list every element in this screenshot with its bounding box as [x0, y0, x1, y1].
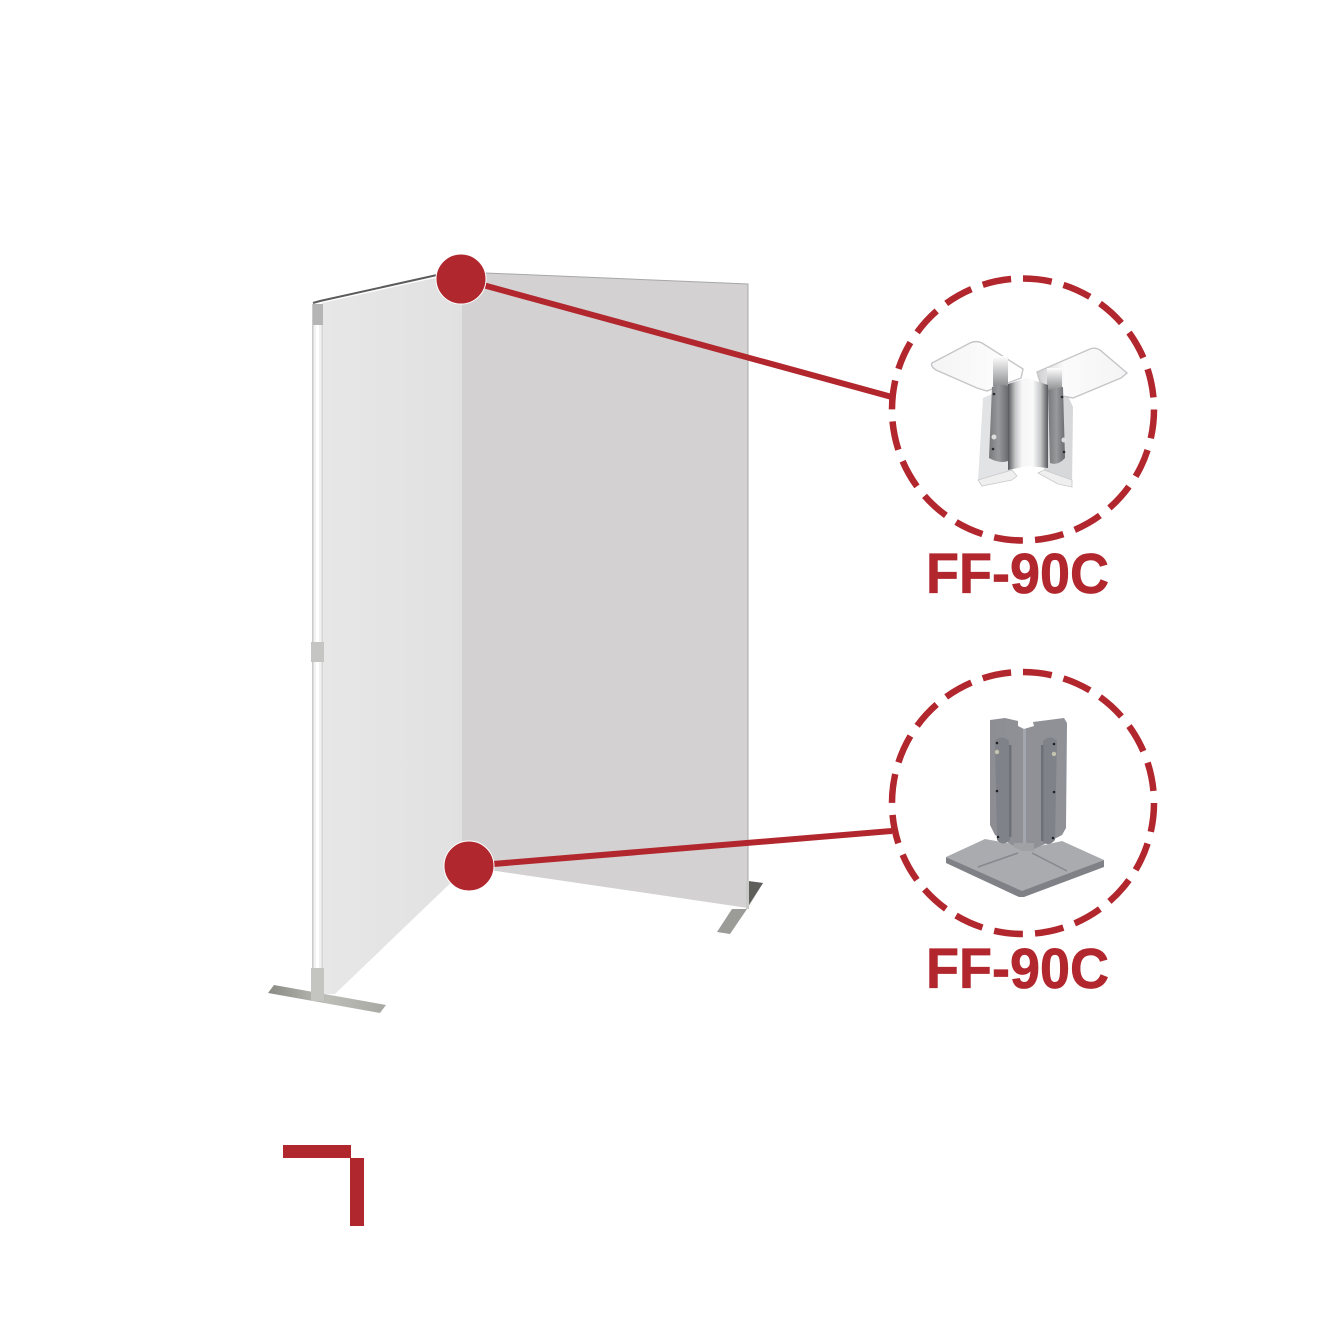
- icon: red corner mark: [283, 1145, 364, 1226]
- callout line: bottom connector: [469, 831, 892, 866]
- set screws: [995, 750, 1056, 756]
- icon: bottom corner base: [946, 718, 1104, 897]
- post spine: [1023, 729, 1026, 849]
- panel: right wall: [462, 272, 748, 908]
- post left wing: [990, 718, 1024, 849]
- screws: [992, 393, 1065, 453]
- label: top part code: FF-90C: [926, 542, 1109, 606]
- left cylinder: [989, 385, 1008, 462]
- base grooves: [978, 853, 1067, 871]
- top edge of left wall: [313, 275, 437, 303]
- right clip: [1038, 470, 1072, 487]
- right bracket wing: [1044, 385, 1073, 487]
- right cylinder: [1048, 387, 1065, 464]
- mid rail connector: [311, 642, 324, 662]
- cylinder shadows: [1009, 745, 1044, 841]
- screws: [996, 742, 1055, 839]
- base thickness: [946, 857, 1104, 897]
- dashed circle: bottom detail: [892, 672, 1154, 934]
- panel: left wall: [322, 272, 462, 994]
- right post cylinder: [1043, 738, 1057, 844]
- set screws: [992, 434, 1066, 442]
- right top plate: [1037, 348, 1127, 398]
- post right wing: [1024, 718, 1067, 849]
- centre shaft: [1008, 378, 1048, 470]
- icon: top corner bracket: [932, 342, 1127, 487]
- callout line: top connector: [461, 279, 892, 397]
- left foot bracket: [311, 968, 324, 1001]
- label: bottom part code: FF-90C: [926, 937, 1109, 1001]
- left bracket wing: [978, 385, 1012, 481]
- top rail connector: [313, 304, 323, 325]
- plate shadows: [993, 356, 1008, 386]
- left foot: [268, 985, 386, 1013]
- left post cylinder: [995, 738, 1010, 844]
- left frame rail: [312, 304, 323, 974]
- marker: top joint: [436, 254, 486, 304]
- post foot: [1014, 843, 1034, 851]
- top edge of right wall: [462, 272, 748, 882]
- left top plate: [932, 342, 1023, 391]
- marker: bottom joint: [444, 841, 494, 891]
- left clip: [978, 470, 1017, 486]
- dashed circle: top detail: [892, 278, 1154, 540]
- display stand: folding wall: [268, 272, 763, 1013]
- base top: [946, 839, 1104, 891]
- right foot: [717, 880, 763, 934]
